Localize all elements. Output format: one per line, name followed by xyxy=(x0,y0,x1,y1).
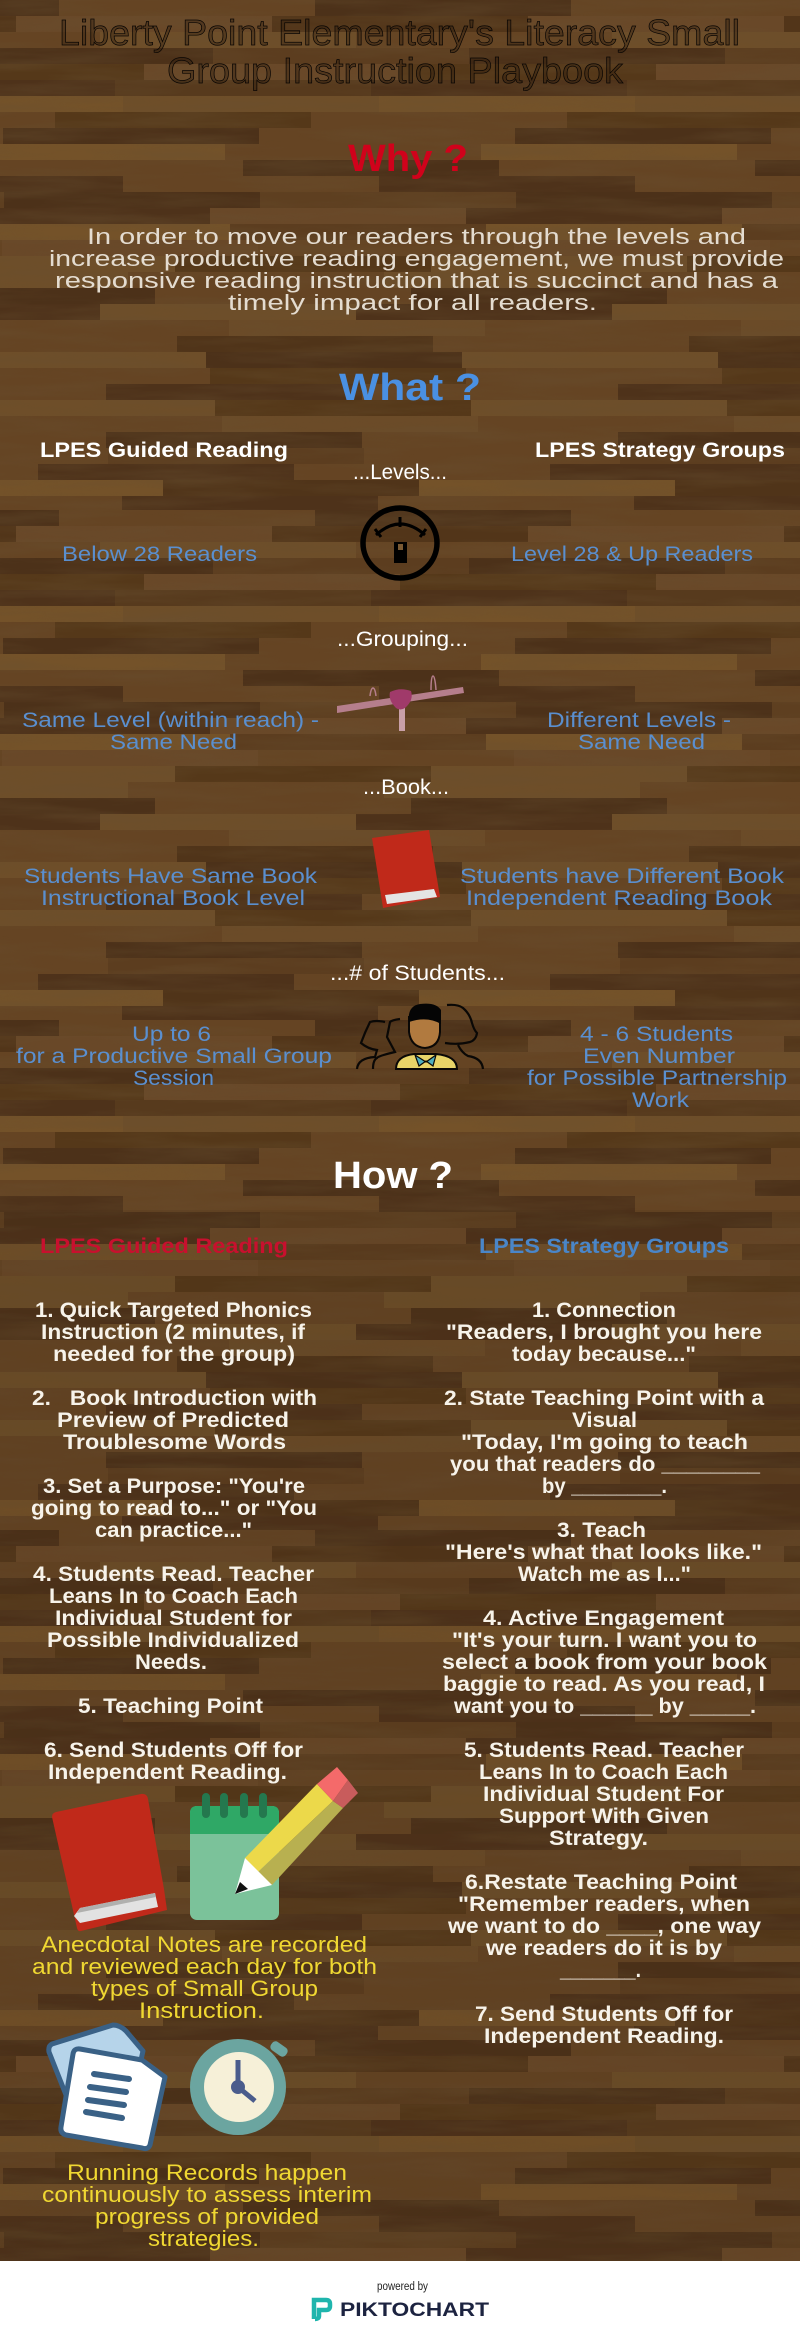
list: strategy group steps: 3. Teach xyxy=(557,1518,646,1542)
list: strategy group steps: Independent Reading. xyxy=(484,2024,724,2048)
list: guided reading steps: Individual Student for xyxy=(55,1606,293,1630)
icon: stopwatch xyxy=(190,2039,289,2135)
list: strategy group steps: Visual xyxy=(572,1408,637,1432)
list: guided reading steps: Leans In to Coach Each xyxy=(49,1584,298,1608)
text: anecdotal notes xyxy=(32,1932,377,2023)
list: strategy group steps: by ________. xyxy=(542,1474,667,1498)
footer: piktochart logo: PIKTOCHART xyxy=(340,2299,489,2321)
text: anecdotal notes: Anecdotal Notes are recorded xyxy=(41,1932,367,1957)
list: guided reading steps: 1. Quick Targeted Phonics xyxy=(35,1298,312,1322)
label: number of students: ...# of Students... xyxy=(330,962,505,985)
list: strategy group steps xyxy=(442,1298,767,2048)
icon: seesaw xyxy=(337,676,464,731)
list: guided reading steps: Independent Reading. xyxy=(48,1760,287,1784)
why paragraph: increase productive reading engagement, we must provide xyxy=(49,246,784,271)
text: 4 to 6 students: for Possible Partnership xyxy=(527,1066,787,1090)
list: strategy group steps: you that readers do ________ xyxy=(450,1452,761,1476)
list: guided reading steps: 5. Teaching Point xyxy=(78,1694,263,1718)
text: 4 to 6 students: Work xyxy=(632,1088,689,1112)
text: same level same need: Same Level (within reach) - xyxy=(22,708,319,732)
text: different levels same need xyxy=(547,708,731,754)
list: strategy group steps: 6.Restate Teaching Point xyxy=(465,1870,737,1894)
text: 4 to 6 students: 4 - 6 Students xyxy=(580,1022,733,1046)
text: anecdotal notes: types of Small Group xyxy=(91,1976,318,2001)
list: strategy group steps: 7. Send Students Off for xyxy=(475,2002,734,2026)
text: different levels same need: Different Levels - xyxy=(547,708,731,732)
text: 4 to 6 students: Even Number xyxy=(583,1044,735,1068)
list: strategy group steps: we want to do ____, one way xyxy=(447,1914,761,1938)
text: running records: continuously to assess interim xyxy=(42,2182,372,2207)
icon: documents xyxy=(49,2025,165,2149)
text: up to 6: Up to 6 xyxy=(132,1022,211,1046)
icon: red book xyxy=(372,830,440,908)
list: guided reading steps: needed for the group) xyxy=(53,1342,295,1366)
label: levels: ...Levels... xyxy=(353,461,447,484)
text: running records xyxy=(42,2160,372,2251)
title: Liberty Point Elementary's Literacy Small xyxy=(59,12,740,53)
heading: how: How ? xyxy=(333,1155,453,1197)
text: below 28 readers: Below 28 Readers xyxy=(62,542,257,566)
text: up to 6 xyxy=(16,1022,332,1090)
list: guided reading steps: Preview of Predicted xyxy=(57,1408,289,1432)
list: guided reading steps: going to read to..." or "You xyxy=(31,1496,317,1520)
list: strategy group steps: "Here's what that looks like." xyxy=(445,1540,762,1564)
text: level 28 and up: Level 28 & Up Readers xyxy=(511,542,753,566)
list: guided reading steps: can practice..." xyxy=(95,1518,252,1542)
text: students have different book: Students have Different Book xyxy=(460,864,784,888)
icon: group of people xyxy=(357,1004,483,1069)
list: guided reading steps: Needs. xyxy=(135,1650,207,1674)
list: strategy group steps: _______. xyxy=(559,1958,641,1982)
list: guided reading steps: Instruction (2 minutes, if xyxy=(41,1320,306,1344)
icon: gauge xyxy=(363,508,437,578)
why paragraph: timely impact for all readers. xyxy=(228,290,597,315)
footer: powered by: powered by xyxy=(377,2281,428,2293)
text: up to 6: Session xyxy=(133,1066,214,1090)
list: guided reading steps: Possible Individualized xyxy=(47,1628,299,1652)
list: guided reading steps: Troublesome Words xyxy=(63,1430,286,1454)
text: running records: Running Records happen xyxy=(67,2160,347,2185)
text: different levels same need: Same Need xyxy=(578,730,705,754)
text: students have different book: Independent Reading Book xyxy=(466,886,772,910)
text: students have same book xyxy=(24,864,317,910)
list: strategy group steps: "It's your turn. I want you to xyxy=(452,1628,757,1652)
list: guided reading steps xyxy=(31,1298,317,1784)
list: strategy group steps: 5. Students Read. Teacher xyxy=(464,1738,745,1762)
text: students have different book xyxy=(460,864,784,910)
column heading: strategy groups: LPES Strategy Groups xyxy=(535,439,785,462)
label: book: ...Book... xyxy=(363,776,449,799)
list: strategy group steps: 2. State Teaching Point with a xyxy=(444,1386,765,1410)
icon: notepad and pencil xyxy=(190,1767,358,1920)
list: strategy group steps: today because..." xyxy=(512,1342,696,1366)
icon: large red book xyxy=(52,1794,167,1931)
why paragraph xyxy=(49,224,784,315)
text: same level same need xyxy=(22,708,319,754)
list: guided reading steps: 4. Students Read. Teacher xyxy=(33,1562,315,1586)
list: strategy group steps: we readers do it is by xyxy=(485,1936,722,1960)
label: grouping: ...Grouping... xyxy=(337,628,468,651)
list: guided reading steps: 2. Book Introduction with xyxy=(32,1386,317,1410)
footer band xyxy=(0,2261,800,2342)
text: students have same book: Students Have Same Book xyxy=(24,864,317,888)
text: 4 to 6 students xyxy=(527,1022,787,1112)
list: strategy group steps: "Readers, I brought you here xyxy=(446,1320,762,1344)
heading: what: What ? xyxy=(339,367,481,409)
heading: guided reading steps: LPES Guided Reading xyxy=(40,1235,288,1258)
list: strategy group steps: "Today, I'm going to teach xyxy=(461,1430,748,1454)
text: anecdotal notes: and reviewed each day for both xyxy=(32,1954,377,1979)
text: anecdotal notes: Instruction. xyxy=(139,1998,264,2023)
list: guided reading steps: 6. Send Students Off for xyxy=(44,1738,304,1762)
text: up to 6: for a Productive Small Group xyxy=(16,1044,332,1068)
text: same level same need: Same Need xyxy=(110,730,237,754)
why paragraph: responsive reading instruction that is succinct and has a xyxy=(55,268,779,293)
list: strategy group steps: select a book from your book xyxy=(442,1650,767,1674)
text: running records: strategies. xyxy=(148,2226,259,2251)
list: strategy group steps: want you to ______ by _____. xyxy=(453,1694,756,1718)
list: strategy group steps: baggie to read. As you read, I xyxy=(443,1672,765,1696)
list: strategy group steps: 1. Connection xyxy=(532,1298,676,1322)
heading: why: Why ? xyxy=(348,138,468,180)
why paragraph: In order to move our readers through the levels and xyxy=(87,224,746,249)
list: strategy group steps: 4. Active Engagement xyxy=(483,1606,724,1630)
list: strategy group steps: Leans In to Coach Each xyxy=(479,1760,728,1784)
list: strategy group steps: Strategy. xyxy=(549,1826,648,1850)
column heading: guided reading: LPES Guided Reading xyxy=(40,439,288,462)
text: students have same book: Instructional Book Level xyxy=(41,886,305,910)
list: strategy group steps: Support With Given xyxy=(499,1804,709,1828)
heading: strategy group steps: LPES Strategy Groups xyxy=(479,1235,729,1258)
list: strategy group steps: "Remember readers, when xyxy=(458,1892,750,1916)
list: strategy group steps: Watch me as I..." xyxy=(518,1562,691,1586)
title: Group Instruction Playbook xyxy=(167,50,624,91)
text: running records: progress of provided xyxy=(95,2204,319,2229)
list: guided reading steps: 3. Set a Purpose: "You're xyxy=(43,1474,305,1498)
list: strategy group steps: Individual Student For xyxy=(483,1782,725,1806)
title xyxy=(59,12,740,91)
